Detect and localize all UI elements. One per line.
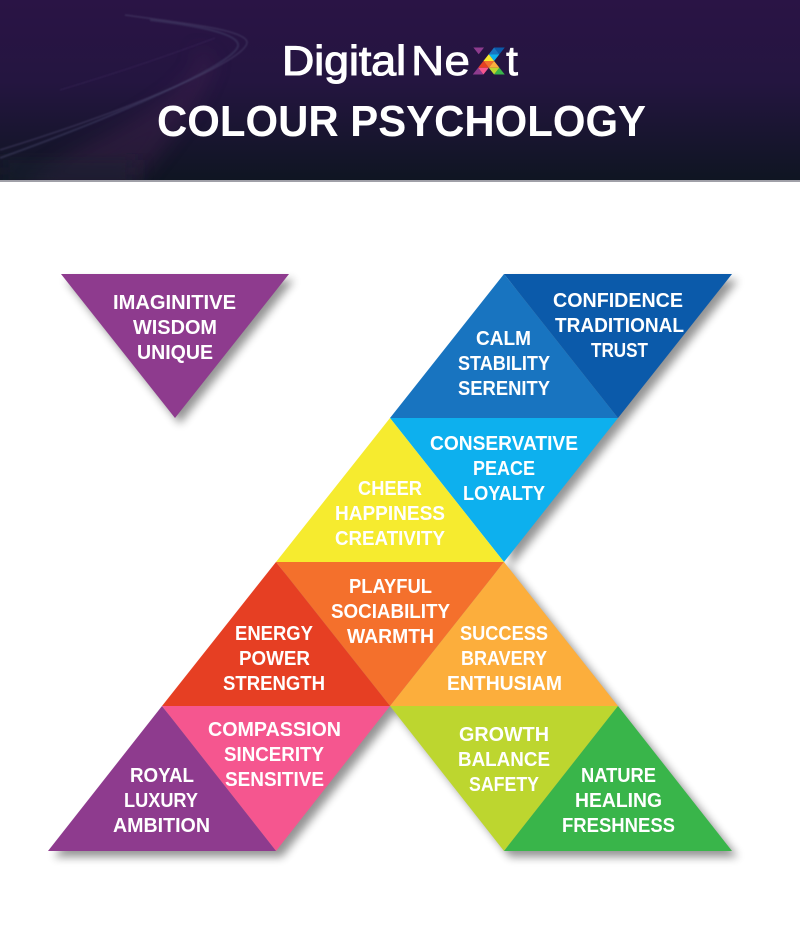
triangle: growth (lime): SAFETY: [469, 773, 539, 796]
triangle: nature (green): FRESHNESS: [562, 814, 675, 837]
triangle: growth (lime): GROWTH: [459, 723, 549, 746]
triangle: imaginitive (purple): WISDOM: [133, 316, 217, 339]
triangle: compassion (pink): [162, 706, 390, 851]
triangle: calm (mid blue): CALM: [476, 327, 531, 350]
logo: DigitalNext: [282, 37, 518, 84]
triangle: energy (red): [162, 562, 390, 706]
triangle: royal (purple): ROYAL: [130, 764, 194, 787]
triangle: playful (orange): [276, 562, 504, 706]
triangle: compassion (pink): SENSITIVE: [225, 768, 324, 791]
triangle: royal (purple): [48, 706, 276, 851]
triangle: cheer (yellow): CHEER: [358, 477, 422, 500]
triangle: energy (red): ENERGY: [235, 622, 313, 645]
triangle: calm (mid blue): STABILITY: [458, 352, 550, 375]
triangle: energy (red): STRENGTH: [223, 672, 325, 695]
triangle: nature (green): NATURE: [581, 764, 656, 787]
triangle: growth (lime): BALANCE: [458, 748, 550, 771]
triangle: success (amber): [390, 562, 618, 706]
triangle: compassion (pink): COMPASSION: [208, 718, 341, 741]
logo: DigitalNext: Ne: [411, 37, 470, 84]
triangle: royal (purple): AMBITION: [113, 814, 210, 837]
triangle: imaginitive (purple): IMAGINITIVE: [113, 291, 236, 314]
road light trails: [0, 15, 247, 185]
triangle: energy (red): POWER: [239, 647, 310, 670]
triangle: calm (mid blue): SERENITY: [458, 377, 550, 400]
drop shadows of the triangles: [54, 280, 738, 857]
logo: DigitalNext: t: [506, 37, 518, 84]
header banner: [0, 0, 800, 185]
icon: colourful X: [473, 48, 505, 75]
triangle: conservative (light blue): CONSERVATIVE: [430, 432, 578, 455]
triangle: growth (lime): [390, 706, 618, 851]
triangle: playful (orange): WARMTH: [347, 625, 434, 648]
triangle: confidence (dark blue): TRUST: [591, 339, 648, 362]
triangle: nature (green): HEALING: [575, 789, 662, 812]
triangle: imaginitive (purple): [61, 274, 289, 418]
triangle: conservative (light blue): PEACE: [473, 457, 535, 480]
logo: DigitalNext: Digital: [282, 37, 406, 84]
triangle: compassion (pink): SINCERITY: [224, 743, 324, 766]
triangle: nature (green): [504, 706, 732, 851]
triangle: confidence (dark blue): [504, 274, 732, 418]
triangle: playful (orange): PLAYFUL: [349, 575, 432, 598]
triangle: confidence (dark blue): CONFIDENCE: [553, 289, 683, 312]
triangle: royal (purple): LUXURY: [124, 789, 198, 812]
triangle: success (amber): ENTHUSIAM: [447, 672, 562, 695]
triangle: success (amber): BRAVERY: [461, 647, 547, 670]
triangle: playful (orange): SOCIABILITY: [331, 600, 450, 623]
triangle: calm (mid blue): [390, 274, 618, 418]
triangle: confidence (dark blue): TRADITIONAL: [555, 314, 684, 337]
triangle: conservative (light blue): LOYALTY: [463, 482, 545, 505]
triangle: conservative (light blue): [390, 418, 618, 562]
triangle: imaginitive (purple): UNIQUE: [137, 341, 213, 364]
triangle: cheer (yellow): HAPPINESS: [335, 502, 445, 525]
triangle: cheer (yellow): CREATIVITY: [335, 527, 445, 550]
triangle: success (amber): SUCCESS: [460, 622, 548, 645]
triangle: cheer (yellow): [276, 418, 504, 562]
title: COLOUR PSYCHOLOGY: [157, 97, 646, 146]
